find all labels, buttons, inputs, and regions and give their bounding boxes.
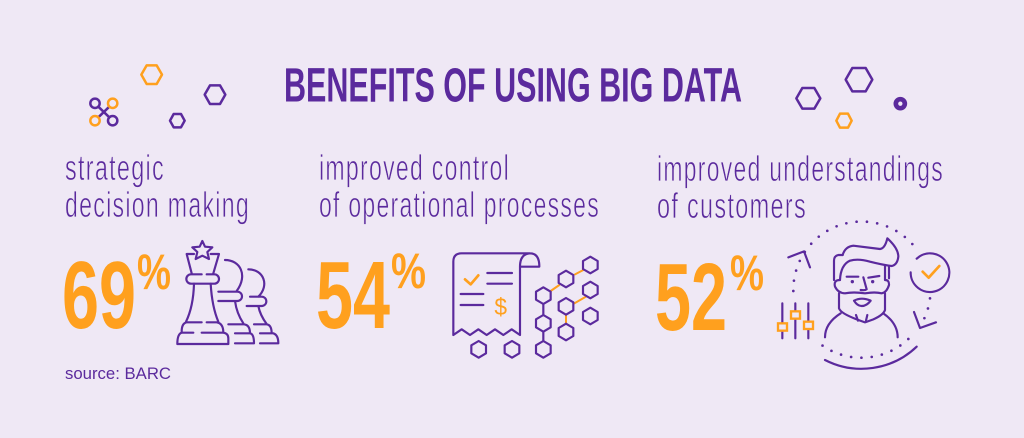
column 3 label: of customers bbox=[657, 185, 807, 226]
title: BENEFITS OF USING BIG DATA bbox=[284, 60, 742, 112]
column 3 label bbox=[657, 148, 944, 226]
icon: receipt with hexagon network bbox=[453, 253, 598, 358]
decorative icons: top right hexagons bbox=[796, 68, 905, 128]
column 1 label bbox=[65, 147, 250, 225]
column 3 stat: 52%: % bbox=[730, 245, 764, 301]
column 3 stat: 52%: 52 bbox=[655, 244, 727, 351]
source note: source: BARC bbox=[65, 364, 171, 383]
icon: chess pieces bbox=[177, 241, 278, 344]
icon: receipt with hexagon network: $ bbox=[494, 294, 507, 321]
column 1 stat: 69%: % bbox=[137, 244, 171, 300]
column 1 label: strategic bbox=[65, 147, 165, 188]
icon: customer portrait with sliders and check bbox=[778, 222, 949, 369]
decorative icons: top left hexagons and network bbox=[90, 65, 225, 127]
column 1 stat: 69%: 69 bbox=[62, 242, 136, 349]
column 2 label: of operational processes bbox=[319, 184, 600, 225]
column 2 stat: 54%: % bbox=[391, 243, 426, 299]
column 2 label: improved control bbox=[319, 147, 510, 188]
column 1 label: decision making bbox=[65, 184, 250, 225]
column 2 label bbox=[319, 147, 600, 225]
column 2 stat: 54%: 54 bbox=[316, 242, 390, 349]
